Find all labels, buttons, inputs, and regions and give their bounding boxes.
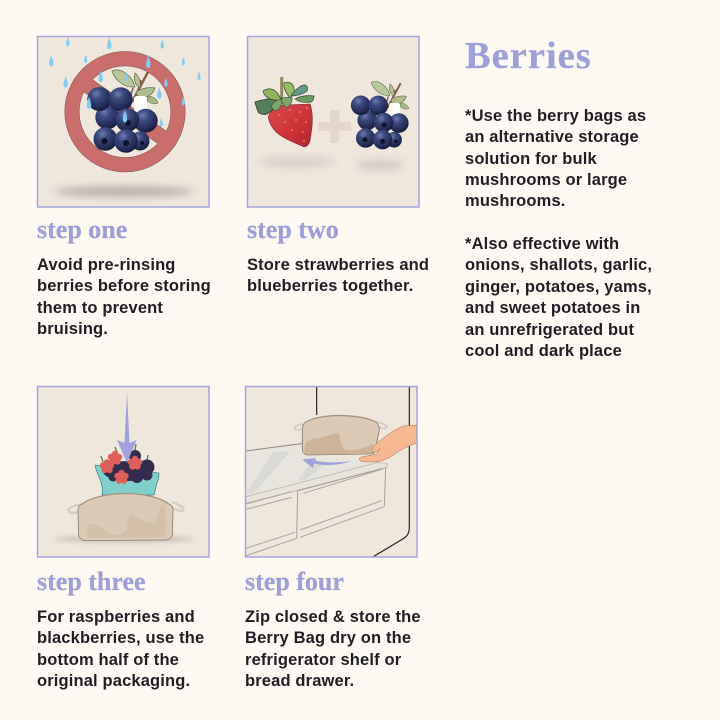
text: step four: Zip closed & store the [245,608,421,626]
text: bulk mushrooms note: mushrooms. [465,192,566,210]
text: bulk mushrooms note: solution for bulk [465,150,597,168]
icon: down arrow [117,392,136,463]
text: step two: Store strawberries and [247,256,429,274]
text: step four [245,608,421,690]
refrigerator door lines [317,387,409,557]
text: bulk mushrooms note: mushrooms or large [465,171,627,189]
text: bulk mushrooms note [465,107,646,210]
icon: no symbol [72,59,178,165]
text: step three [37,608,204,690]
heading: step one: step one [37,215,127,244]
text: step three: original packaging. [37,672,190,690]
text: other vegetables note [465,235,652,360]
text: step three: bottom half of the [37,651,179,669]
text: other vegetables note: ginger, potatoes, yams, [465,278,652,296]
panel: step one illustration [38,36,209,207]
icon: strawberry [255,77,314,147]
text: step one: them to prevent [37,299,163,317]
text: other vegetables note: cool and dark place [465,342,622,360]
text: step one [37,256,211,338]
panel: step four illustration [246,386,417,557]
text: step three: For raspberries and [37,608,195,626]
shadow under bag [54,536,194,542]
text: step one: Avoid pre-rinsing [37,256,176,274]
text: bulk mushrooms note: an alternative storage [465,128,639,146]
icon: blueberry cluster [351,81,409,149]
text: other vegetables note: *Also effective with [465,235,619,253]
icon: berry container [95,444,159,495]
icon: curved arrow [302,458,352,468]
text: step four: Berry Bag dry on the [245,629,411,647]
text: step four: bread drawer. [245,672,354,690]
refrigerator drawers [246,467,386,556]
title: Berries [465,35,592,77]
panel: step three illustration [38,386,209,557]
text: other vegetables note: onions, shallots, garlic, [465,256,652,274]
text: other vegetables note: and sweet potatoes in [465,299,641,317]
text: step four: refrigerator shelf or [245,651,401,669]
icon: raindrops [49,37,201,127]
icon: hand [359,425,417,462]
icon: berry bag [69,494,183,540]
panel: step two illustration [248,36,419,207]
refrigerator shelf [246,443,387,503]
text: step two [247,256,429,295]
text: other vegetables note: an unrefrigerated but [465,321,634,339]
icon: plus sign [318,110,351,143]
shadow under blueberries [356,160,404,170]
text: step one: bruising. [37,320,108,338]
heading: step four: step four [245,567,344,596]
text: step three: blackberries, use the [37,629,204,647]
heading: step three: step three [37,567,146,596]
icon: blueberry cluster [87,70,158,153]
text: bulk mushrooms note: *Use the berry bags as [465,107,646,125]
text: step one: berries before storing [37,277,211,295]
shadow under strawberry [259,156,335,168]
shadow under berries [54,186,194,196]
icon: berry bag [295,415,387,455]
text: step two: blueberries together. [247,277,413,295]
heading: step two: step two [247,215,339,244]
